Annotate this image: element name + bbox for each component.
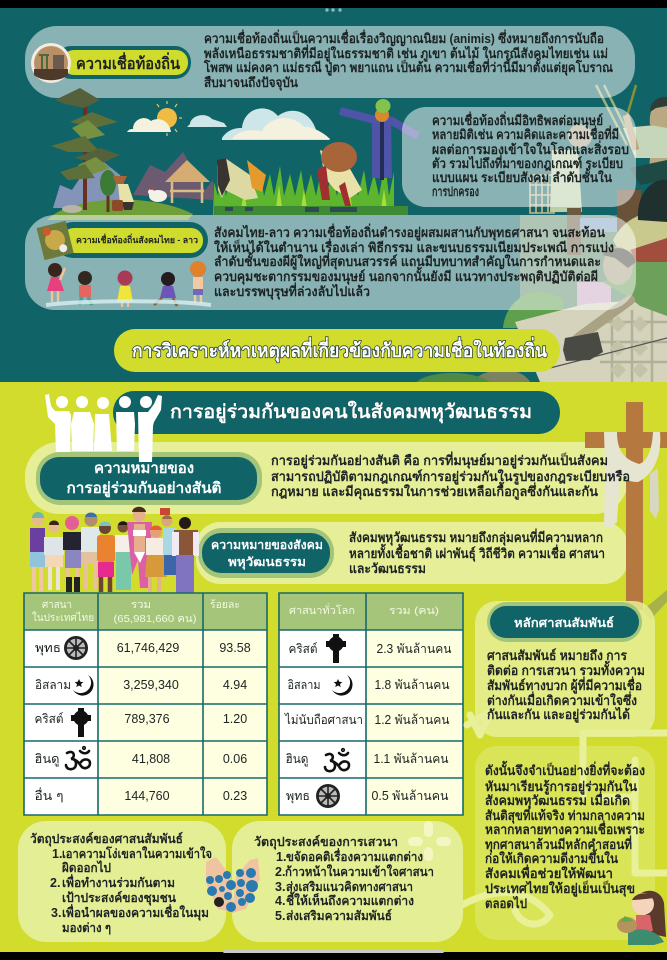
panel: objectives of interfaith: วัตถุประสงค์ของศาสนสัมพันธ์ — [30, 831, 183, 847]
text: conclusion paragraph: ตลอดไป — [485, 895, 527, 911]
label pill: Thai-Lao belief: ความเชื่อท้องถิ่นสังคมไทย - ลาว — [76, 233, 198, 245]
panel: Thai-Lao society — [25, 215, 636, 310]
table rows: 0.23 — [223, 789, 247, 803]
table header: (65,981,660 คน) — [114, 613, 196, 625]
table rows: อิสลาม — [288, 678, 320, 692]
table rows: 0.06 — [223, 752, 247, 766]
table header — [32, 599, 240, 625]
text: influence paragraph: ความเชื่อท้องถิ่นมีอิทธิพลต่อมนุษย์ — [432, 111, 603, 129]
label: meaning of peaceful coexistence: การอยู่ร่วมกันอย่างสันติ — [66, 479, 222, 498]
label: meaning of multicultural society: ความหมายของสังคม — [211, 538, 323, 552]
icon: scarecrow — [340, 99, 418, 180]
text: influence paragraph: หลายมิติเช่น ความคิดและความเชื่อที่มี — [432, 125, 619, 142]
text: conclusion paragraph: ดังนั้นจึงจำเป็นอย่างยิ่งที่จะต้อง — [485, 760, 645, 778]
text: peaceful coexistence paragraph — [271, 451, 630, 500]
text: objectives list: เป้าประสงค์ของชุมชน — [62, 890, 176, 906]
icon: praying Thai girl with basket — [617, 891, 666, 945]
icon: farmer bending right — [317, 142, 362, 206]
icon: diverse group of people — [30, 507, 199, 593]
label pill: local belief: ความเชื่อท้องถิ่น — [76, 52, 180, 73]
text: influence paragraph: การปกครอง — [432, 184, 479, 199]
background: teal upper section — [0, 8, 667, 383]
table rows — [284, 634, 452, 808]
text: dialogue list: 2. — [275, 865, 285, 879]
table header: รวม — [131, 599, 151, 611]
label: meaning of multicultural society: พหุวัฒนธรรม — [228, 555, 306, 570]
text: objectives list: ผิดออกไป — [61, 860, 111, 875]
icon: small tree and farmer with basket — [62, 170, 134, 213]
text: dialogue list: 1. — [276, 850, 286, 864]
text: interfaith paragraph — [487, 648, 645, 723]
text: dialogue list: ชี้ให้เห็นถึงความแตกต่าง — [286, 891, 414, 908]
table rows: ฮินดู — [34, 752, 60, 767]
text: interfaith paragraph: สัมพันธ์ทางบวก ผู้ที่มีความเชื่อ — [487, 676, 642, 694]
text: conclusion paragraph: ก่อให้เกิดความดีงามขึ้นใน — [485, 848, 618, 866]
text: multicultural paragraph: หลายทั้งเชื้อชาติ เผ่าพันธุ์ วิถีชีวิต ความเชื่อ ศาสนา — [349, 543, 605, 562]
table header: ร้อยละ — [210, 599, 240, 611]
text: conclusion paragraph: ทุกศาสนาล้วนมีหลักคำสอนที่ — [485, 835, 632, 853]
table header: รวม (คน) — [389, 605, 439, 617]
text: interfaith paragraph: กันและกัน และอยู่ร่วมกันได้ — [487, 706, 630, 723]
table rows: 144,760 — [124, 789, 170, 803]
text: conclusion paragraph: หันมาเรียนรู้การอยู่ร่วมกันใน — [485, 778, 637, 795]
text: Thai-Lao paragraph: และบรรพบุรุษที่ล่วงลับไปแล้ว — [214, 282, 370, 300]
icon: hands holding religious symbols — [206, 857, 260, 913]
table rows: 93.58 — [219, 641, 251, 655]
text: Thai-Lao paragraph: ลำดับชั้นของผีผู้ใหญ่ที่สุดบนสวรรค์ แถนมีบทบาทสำคัญในการกำหนดและ — [214, 251, 601, 270]
illustration: basket weavers at right — [417, 85, 667, 382]
text: objectives list: เพื่อนำผลของความเชื่อในมุม — [62, 904, 209, 921]
text: dialogue list: 4. — [275, 894, 285, 908]
table rows: ไม่นับถือศาสนา — [284, 713, 363, 727]
text: Thai-Lao paragraph — [214, 223, 614, 300]
text: influence paragraph: ผลต่อการมองเข้าใจในโลกและสิ่งรอบ — [432, 140, 629, 157]
table rows: 789,376 — [124, 712, 170, 726]
table rows: พุทธ — [286, 789, 310, 804]
table rows: อื่น ๆ — [34, 787, 64, 803]
text: dialogue list: ก้าวหน้าในความเข้าใจศาสนา — [285, 864, 434, 879]
table rows: 4.94 — [223, 678, 247, 692]
table header: ในประเทศไทย — [32, 611, 94, 624]
text: interfaith paragraph: ติดต่อ การเสวนา รวมทั้งความ — [487, 660, 645, 678]
text: peaceful coexistence paragraph: กฎหมาย และมีคุณธรรมในการช่วยเหลือเกื้อกูลซึ่งกันและกัน — [271, 481, 598, 500]
table rows: 2.3 พันล้านคน — [376, 642, 452, 656]
text: dialogue list: 3. — [275, 880, 285, 894]
icon: clouds — [127, 108, 330, 140]
text: Thai-Lao paragraph: สังคมไทย-ลาว ความเชื่อท้องถิ่นดำรงอยู่ผสมผสานกับพุทธศาสนา จนสะท้อน — [214, 223, 605, 241]
label: interfaith principles: หลักศาสนสัมพันธ์ — [514, 616, 614, 630]
text: dialogue list: ส่งเสริมแนวคิดทางศาสนา — [286, 880, 413, 894]
text: multicultural paragraph: สังคมพหุวัฒนธรรม หมายถึงกลุ่มคนที่มีความหลาก — [349, 528, 603, 546]
label pill: local belief — [31, 43, 191, 83]
label: meaning of peaceful coexistence: ความหมายของ — [94, 460, 194, 477]
table header: ศาสนา — [42, 599, 72, 611]
table: world religions — [279, 593, 463, 815]
text: local belief paragraph: สืบมาจนถึงปัจจุบัน — [204, 75, 298, 91]
text: Thai-Lao paragraph: ให้เห็นได้ในตำนาน เรื่องเล่า พิธีกรรม และขนบธรรมเนียมประเพณี การแบ่ง — [214, 238, 614, 255]
table rows: 1.2 พันล้านคน — [374, 713, 450, 727]
icon: farmer bending left — [217, 158, 266, 200]
icon: sun — [157, 101, 182, 136]
panel: influence of local beliefs — [402, 107, 636, 207]
text: dialogue list — [275, 848, 434, 923]
text: conclusion paragraph: ประเทศไทยให้อยู่เย็นเป็นสุข — [485, 879, 635, 897]
text: objectives list — [50, 846, 212, 935]
text: local belief paragraph: พลังเหนือธรรมชาติที่มีอยู่ในธรรมชาติ เช่น ภูเขา ต้นไม้ ในกรณีสังคมไทยเช่น แม่ — [204, 44, 608, 62]
panel: local belief definition — [25, 26, 635, 98]
text: dialogue list: ขจัดอคติเรื่องความแตกต่าง — [286, 848, 423, 864]
text: dialogue list: ส่งเสริมความสัมพันธ์ — [286, 908, 392, 923]
text: local belief paragraph: โพสพ แม่คงคา แม่ธรณี ปู่ตา พยาแถน เป็นต้น ความเชื่อที่ว่านี้มีมาตั้งแต่ยุคโบราณ — [203, 57, 613, 76]
text: interfaith paragraph: ศาสนสัมพันธ์ หมายถึง การ — [487, 648, 627, 663]
table header — [289, 603, 439, 617]
table rows — [34, 636, 251, 803]
text: influence paragraph: แบบแผน ระเบียบสังคม ลำดับชั้นใน — [432, 167, 612, 185]
table rows: 1.20 — [223, 712, 247, 726]
text: local belief paragraph: ความเชื่อท้องถิ่นเป็นความเชื่อเรื่องวิญญาณนิยม (animis) ซึ่งหมายถึงการนับถือ — [204, 29, 604, 47]
text: influence paragraph — [432, 111, 629, 199]
banner: analysis of reasons — [114, 329, 560, 372]
text: conclusion paragraph: สังคมเพื่อช่วยให้พัฒนา — [485, 864, 613, 881]
table rows: 0.5 พันล้านคน — [372, 789, 449, 803]
panel: objectives of dialogue — [232, 821, 463, 942]
table rows: 3,259,340 — [123, 678, 179, 692]
text: conclusion paragraph: สันติสุขที่แท้จริง ท่ามกลางความ — [485, 806, 645, 824]
status dots — [325, 8, 342, 12]
panel: conclusion — [475, 746, 655, 940]
table header: ศาสนาทั่วโลก — [289, 603, 355, 617]
text: peaceful coexistence paragraph: สามารถปฏิบัติตามกฎเกณฑ์การอยู่ร่วมกันในรูปของกฎระเบียบหรือ — [271, 468, 630, 485]
text: interfaith paragraph: ต่างกันเมื่อเกิดความเข้าใจซึ่ง — [487, 691, 637, 708]
text: objectives list: 3. — [51, 906, 61, 920]
table rows: 41,808 — [132, 752, 170, 766]
panel: objectives of interfaith — [18, 821, 226, 942]
table rows: ฮินดู — [286, 752, 308, 767]
panel: peaceful coexistence meaning — [25, 442, 628, 514]
text: peaceful coexistence paragraph: การอยู่ร่วมกันอย่างสันติ คือ การที่มนุษย์มาอยู่ร่วมกันเป็นสังคม — [271, 451, 608, 469]
text: influence paragraph: ตัว รวมไปถึงที่มาของกฎเกณฑ์ ระเบียบ — [432, 154, 623, 172]
panel: interfaith principles — [475, 601, 655, 737]
panel: objectives of dialogue: วัตถุประสงค์ของการเสวนา — [254, 834, 398, 850]
table: religions in Thailand — [24, 593, 267, 815]
illustration: rural rice farming scene — [47, 88, 418, 220]
icon: chicken — [148, 189, 167, 202]
table rows: คริสต์ — [288, 642, 318, 656]
icon: hut — [165, 160, 210, 203]
text: objectives list: เอาความโง่เขลาในความเข้าใจ — [62, 846, 212, 861]
text: multicultural paragraph: และวัฒนธรรม — [349, 561, 426, 576]
table rows: อิสลาม — [35, 678, 71, 692]
heading: coexistence in multicultural society — [113, 391, 560, 434]
banner: analysis of reasons: การวิเคราะห์หาเหตุผลที่เกี่ยวข้องกับความเชื่อในท้องถิ่น — [132, 337, 547, 363]
label: meaning of peaceful coexistence — [36, 452, 262, 505]
text: multicultural paragraph — [349, 528, 605, 576]
table rows: คริสต์ — [34, 712, 64, 726]
label: meaning of multicultural society — [198, 528, 334, 578]
table rows: 61,746,429 — [117, 641, 179, 655]
text: objectives list: มองต่าง ๆ — [62, 921, 111, 935]
text: objectives list: 1. — [52, 847, 62, 861]
text: Thai-Lao paragraph: ควบคุมชะตากรรมของมนุษย์ นอกจากนั้นยังมี แนวทางประพฤติปฏิบัติต่อผี — [214, 266, 598, 285]
icon: wooden cross with cloth — [585, 402, 667, 620]
icon: children playing water — [46, 261, 211, 307]
panel: multicultural society meaning — [196, 522, 628, 584]
icon: white religious figures — [45, 394, 162, 462]
icon: rice field — [213, 162, 394, 215]
text: conclusion paragraph: สังคมพหุวัฒนธรรม เมื่อเกิด — [485, 791, 630, 809]
table rows: 1.1 พันล้านคน — [374, 752, 449, 766]
home indicator — [223, 950, 444, 953]
label: interfaith principles — [487, 602, 642, 642]
text: objectives list: 2. — [50, 876, 60, 890]
table rows: พุทธ — [35, 641, 61, 656]
text: local belief paragraph — [203, 29, 613, 91]
heading: coexistence in multicultural society: การอยู่ร่วมกันของคนในสังคมพหุวัฒนธรรม — [170, 400, 532, 424]
background: lime lower section — [0, 382, 667, 952]
text: conclusion paragraph: หลากหลายทางความเชื่อเพราะ — [485, 820, 645, 837]
table rows: 1.8 พันล้านคน — [374, 678, 450, 692]
text: conclusion paragraph — [485, 760, 645, 911]
label pill: Thai-Lao belief — [37, 221, 208, 260]
text: objectives list: เพื่อทำงานร่วมกันตาม — [62, 874, 175, 890]
text: dialogue list: 5. — [275, 909, 285, 923]
